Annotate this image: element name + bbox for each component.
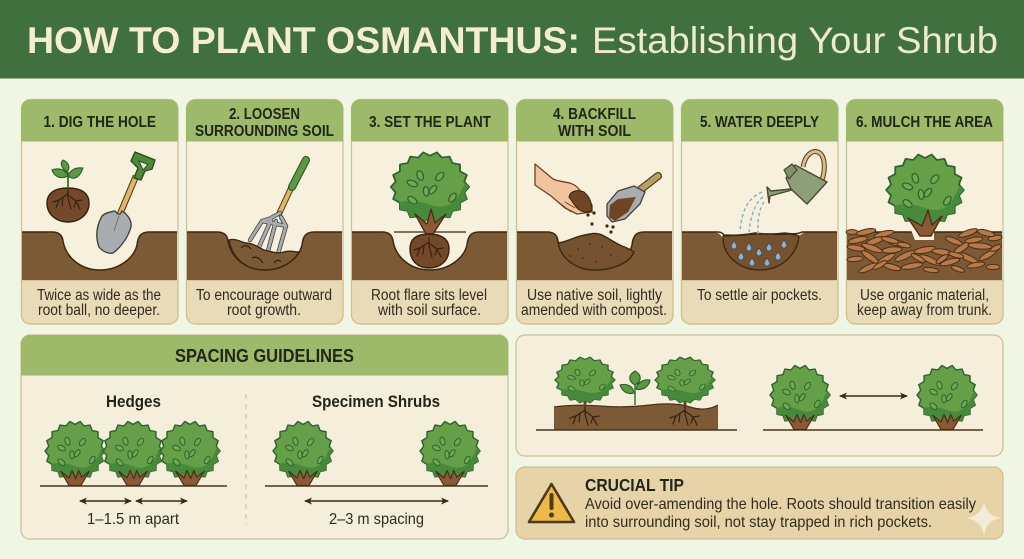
icon: watering can — [767, 152, 827, 204]
title banner — [0, 0, 1024, 78]
panel: step 6 mulch the area: Use organic material, — [860, 287, 989, 304]
callout: crucial tip: into surrounding soil, not stay trapped in rich pockets. — [585, 514, 932, 531]
panel: step 6 mulch the area — [846, 100, 1003, 324]
icon: seedling with root ball — [47, 160, 89, 222]
panel: step 1 dig the hole: Twice as wide as the — [37, 287, 161, 304]
hedges group: Hedges — [106, 393, 161, 411]
panel: step 4 backfill with soil — [516, 100, 673, 324]
icon: hand dropping soil — [535, 164, 615, 234]
panel: step 4 backfill with soil: WITH SOIL — [558, 123, 631, 140]
panel: step 5 water deeply — [681, 100, 838, 324]
title banner: HOW TO PLANT OSMANTHUS: — [27, 20, 580, 61]
panel: step 4 backfill with soil: Use native soil, lightly — [527, 287, 662, 304]
panel: step 3 set the plant: with soil surface. — [377, 302, 481, 319]
callout: crucial tip: CRUCIAL TIP — [585, 475, 684, 495]
heading: spacing guidelines: SPACING GUIDELINES — [175, 345, 354, 366]
specimen shrubs group: 2–3 m spacing — [329, 511, 424, 528]
icon: warning triangle — [529, 484, 574, 522]
title banner: Establishing Your Shrub — [592, 20, 998, 61]
icon: sparkle — [966, 501, 1001, 536]
panel: step 3 set the plant: Root flare sits level — [371, 287, 487, 304]
panel: step 3 set the plant: 3. SET THE PLANT — [369, 114, 491, 131]
panel: step 2 loosen surrounding soil: 2. LOOSEN — [229, 106, 300, 123]
panel: step 4 backfill with soil: 4. BACKFILL — [553, 106, 636, 123]
mulch chips — [846, 227, 1002, 275]
illustration: shrubs and seedling in soil — [536, 357, 737, 430]
panel: step 2 loosen surrounding soil: To encourage outward — [196, 287, 332, 304]
panel: step 1 dig the hole — [21, 100, 178, 324]
icon: shovel — [97, 152, 155, 253]
callout: crucial tip: Avoid over-amending the hole. Roots should transition easily — [585, 496, 976, 513]
panel: step 6 mulch the area: 6. MULCH THE AREA — [856, 114, 993, 131]
panel: step 1 dig the hole: 1. DIG THE HOLE — [44, 114, 156, 131]
icon: scoop with soil — [607, 176, 658, 222]
soil mound in hole — [558, 233, 634, 270]
icon: garden fork — [250, 160, 306, 254]
illustration: two shrubs with spacing arrow — [763, 365, 983, 430]
panel: spacing guidelines — [21, 335, 508, 539]
panel: step 2 loosen surrounding soil: root growth. — [227, 302, 301, 319]
callout: crucial tip — [516, 467, 1003, 539]
soil mound in hole — [229, 239, 299, 270]
panel: step 5 water deeply: 5. WATER DEEPLY — [700, 114, 820, 131]
panel: step 5 water deeply: To settle air pockets. — [697, 287, 822, 304]
water stream — [740, 192, 764, 234]
water drops in soil — [731, 240, 787, 266]
panel: step 6 mulch the area: keep away from trunk. — [857, 302, 992, 319]
panel: step 2 loosen surrounding soil — [186, 100, 343, 324]
hedges group: 1–1.5 m apart — [87, 511, 180, 528]
icon: shrub with root ball — [389, 152, 471, 268]
icon: shrub — [884, 155, 966, 240]
panel: step 1 dig the hole: root ball, no deeper. — [38, 302, 160, 319]
panel: step 2 loosen surrounding soil: SURROUNDING SOIL — [195, 123, 334, 140]
panel: planting illustrations — [516, 335, 1003, 456]
specimen shrubs group — [265, 393, 488, 528]
panel: step 3 set the plant — [351, 100, 508, 324]
hedges group — [40, 393, 227, 528]
specimen shrubs group: Specimen Shrubs — [312, 393, 440, 411]
panel: step 4 backfill with soil: amended with compost. — [521, 302, 667, 319]
